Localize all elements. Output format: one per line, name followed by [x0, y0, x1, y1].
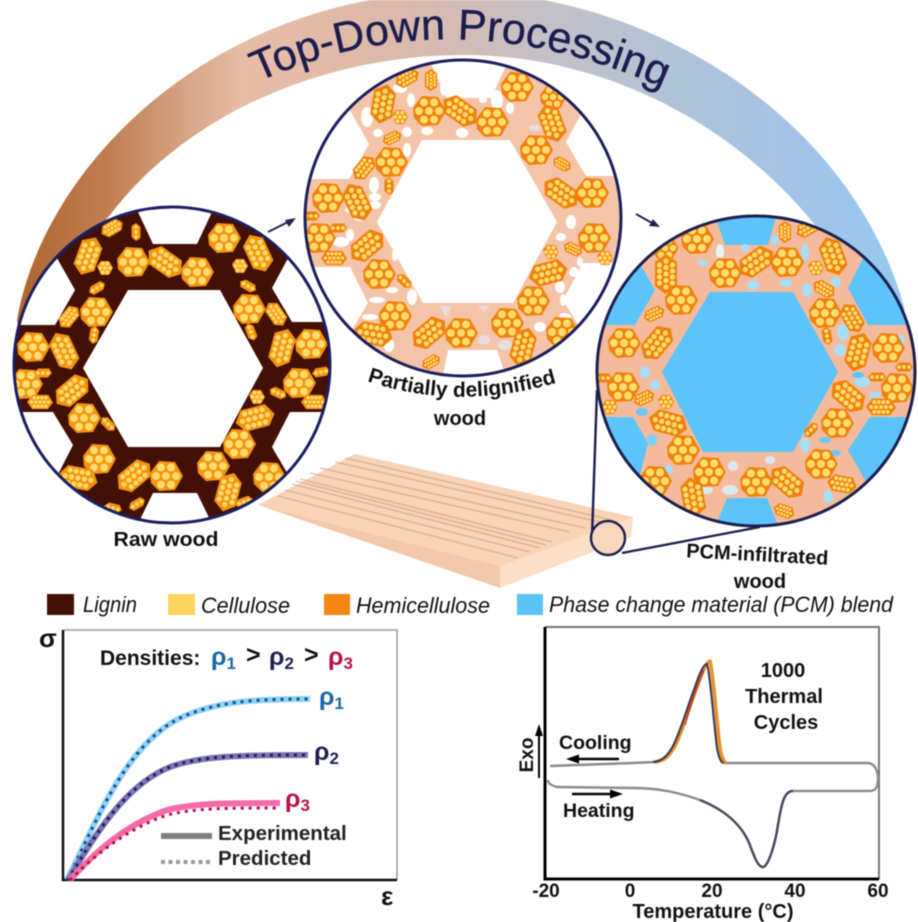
thermal cycles note: 1000 [761, 660, 805, 682]
tick labels: 20 [701, 881, 723, 902]
chart legend: Predicted [218, 847, 311, 870]
axis label: epsilon: ε [381, 881, 393, 911]
circle: raw wood [0, 195, 340, 530]
Exo arrow [535, 724, 543, 778]
density inequality: 1 [226, 654, 236, 673]
legend: Hemicellulose [356, 593, 490, 618]
DSC curves [548, 661, 878, 867]
label: raw wood: Raw wood [114, 529, 218, 551]
density inequality: ρ [328, 643, 343, 671]
curve labels: 3 [300, 796, 310, 815]
legend: Cellulose [201, 593, 290, 618]
density inequality: ρ [211, 643, 226, 671]
legend: Lignin [83, 592, 137, 617]
cellulose fibres in raw wood [10, 216, 331, 515]
chart legend [161, 822, 347, 870]
tick labels [532, 881, 889, 902]
tick labels: 60 [867, 881, 889, 902]
heating label and arrow: Heating [563, 800, 635, 822]
curve rho 1 [67, 699, 310, 880]
chart legend: Experimental [218, 822, 347, 845]
pores left by delignification [333, 80, 583, 352]
legend: Phase change material (PCM) blend [549, 592, 894, 617]
thermal cycles note: Thermal [745, 686, 823, 708]
arrow: raw to partial [268, 218, 296, 232]
tick labels: 0 [625, 881, 635, 902]
label: PCM-infiltrated wood [686, 540, 829, 593]
PCM-filled pores [636, 235, 905, 503]
circle: PCM-infiltrated wood [590, 210, 918, 535]
DSC thermal cycling chart [517, 627, 889, 922]
cooling label and arrow: Cooling [559, 732, 632, 754]
density inequality: > [304, 641, 319, 669]
curve rho 2 [68, 755, 308, 880]
label: PCM-infiltrated wood: wood [733, 571, 786, 593]
top-down processing arc [16, 0, 906, 325]
tick labels: 40 [784, 881, 806, 902]
density inequality: 3 [343, 654, 353, 673]
label: partially delignified wood [368, 367, 556, 430]
title: Top-Down Processing [246, 8, 670, 94]
axis label: sigma: σ [39, 623, 57, 653]
curve labels: 1 [334, 694, 344, 713]
curve labels: ρ [319, 683, 334, 711]
y-axis label: Exo: Exo [517, 738, 538, 772]
circle: partially delignified wood [294, 49, 634, 380]
density inequality: ρ [269, 643, 284, 671]
arrow: partial to PCM [636, 214, 660, 227]
density inequality: > [246, 641, 261, 669]
stress-strain chart [39, 623, 397, 911]
heating label and arrow [563, 790, 635, 822]
curve rho 3 [70, 803, 280, 880]
cellulose fibres in partially delignified wood [302, 65, 613, 372]
densities heading: Densities: [100, 647, 200, 670]
label: partially delignified wood: wood [433, 408, 486, 430]
curve labels: ρ [314, 738, 329, 766]
cellulose fibres in PCM-infiltrated wood [594, 215, 914, 520]
curve labels: ρ [285, 785, 300, 813]
thermal cycles note: Cycles [754, 712, 818, 734]
magnifier on board [591, 390, 760, 555]
wood board [258, 454, 633, 588]
label: PCM-infiltrated wood: PCM-infiltrated [686, 540, 829, 570]
density inequality: 2 [284, 654, 294, 673]
cooling label and arrow [559, 732, 632, 764]
label: partially delignified wood: Partially delignified [368, 367, 556, 401]
tick labels: -20 [532, 881, 560, 902]
curve labels: 2 [329, 749, 339, 768]
legend [47, 592, 894, 618]
